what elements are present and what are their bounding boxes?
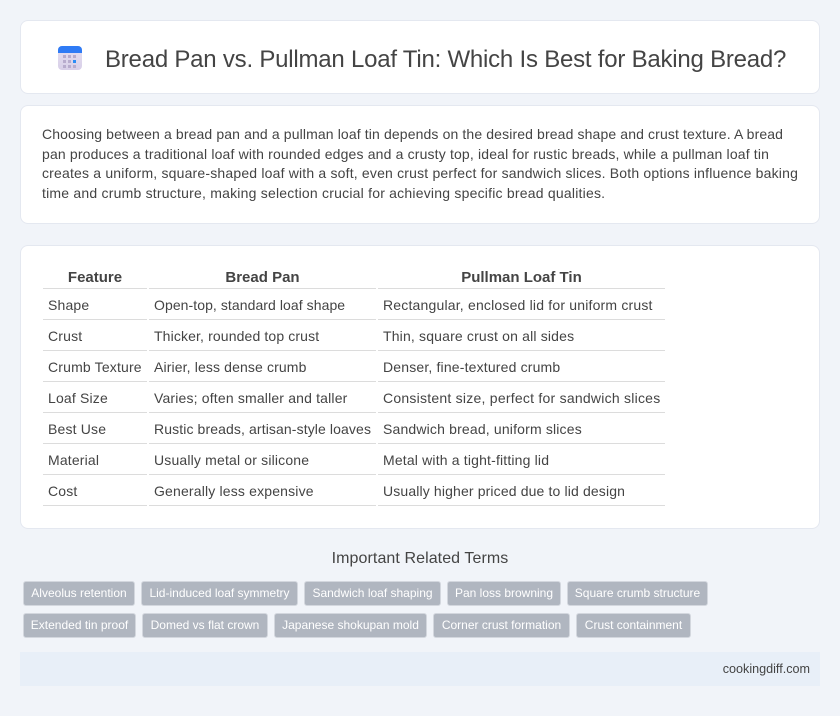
comparison table: Pullman Loaf Tin <box>461 269 582 286</box>
comparison table: Varies; often smaller and taller <box>154 390 348 406</box>
comparison table: Usually metal or silicone <box>154 452 309 468</box>
related term tags: Sandwich loaf shaping <box>312 586 433 600</box>
header card <box>20 20 820 94</box>
comparison table: Rustic breads, artisan-style loaves <box>154 421 371 437</box>
comparison table: Cost <box>48 483 77 499</box>
comparison table: Crumb Texture <box>48 359 142 375</box>
intro paragraph <box>42 126 798 201</box>
comparison table: Feature <box>68 269 122 286</box>
comparison table panel <box>20 245 820 529</box>
comparison table: Thicker, rounded top crust <box>154 328 319 344</box>
related term tags <box>23 581 708 638</box>
comparison table: Loaf Size <box>48 390 108 406</box>
comparison table: Metal with a tight-fitting lid <box>383 452 549 468</box>
comparison table: Material <box>48 452 99 468</box>
intro paragraph: Choosing between a bread pan and a pullman loaf tin depends on the desired bread shape and crust texture. A bread <box>42 126 783 142</box>
related term tags: Alveolus retention <box>31 586 127 600</box>
related terms heading: Important Related Terms <box>332 550 508 567</box>
related term tags: Domed vs flat crown <box>151 618 259 632</box>
related term tags: Japanese shokupan mold <box>282 618 419 632</box>
related term tags: Extended tin proof <box>31 618 128 632</box>
related term tags: Lid-induced loaf symmetry <box>149 586 290 600</box>
comparison table: Bread Pan <box>225 269 300 286</box>
related term tags: Pan loss browning <box>455 586 553 600</box>
related term tags: Crust containment <box>585 618 682 632</box>
intro text panel <box>20 105 820 224</box>
comparison table: Generally less expensive <box>154 483 314 499</box>
comparison table: Best Use <box>48 421 106 437</box>
comparison table: Rectangular, enclosed lid for uniform crust <box>383 297 653 313</box>
comparison table: Consistent size, perfect for sandwich slices <box>383 390 660 406</box>
comparison table: Denser, fine-textured crumb <box>383 359 560 375</box>
comparison table: Open-top, standard loaf shape <box>154 297 345 313</box>
comparison table: Thin, square crust on all sides <box>383 328 574 344</box>
footer source: cookingdiff.com <box>723 662 810 676</box>
related term tags: Square crumb structure <box>575 586 700 600</box>
comparison table: Shape <box>48 297 89 313</box>
comparison table: Airier, less dense crumb <box>154 359 307 375</box>
comparison table: Crust <box>48 328 82 344</box>
intro paragraph: creates a uniform, square-shaped loaf with a soft, even crust perfect for sandwich slices. Both options influence baking <box>42 165 798 181</box>
comparison table: Sandwich bread, uniform slices <box>383 421 582 437</box>
comparison table: Usually higher priced due to lid design <box>383 483 625 499</box>
intro paragraph: time and crumb structure, making selection crucial for achieving specific bread qualities. <box>42 184 605 200</box>
intro paragraph: pan produces a traditional loaf with rounded edges and a crusty top, ideal for rustic breads, while a pullman loaf tin <box>42 146 769 162</box>
icon: calendar <box>58 46 82 70</box>
related term tags: Corner crust formation <box>442 618 561 632</box>
footer bar <box>20 652 820 686</box>
title: Bread Pan vs. Pullman Loaf Tin: Which Is Best for Baking Bread? <box>105 46 786 73</box>
